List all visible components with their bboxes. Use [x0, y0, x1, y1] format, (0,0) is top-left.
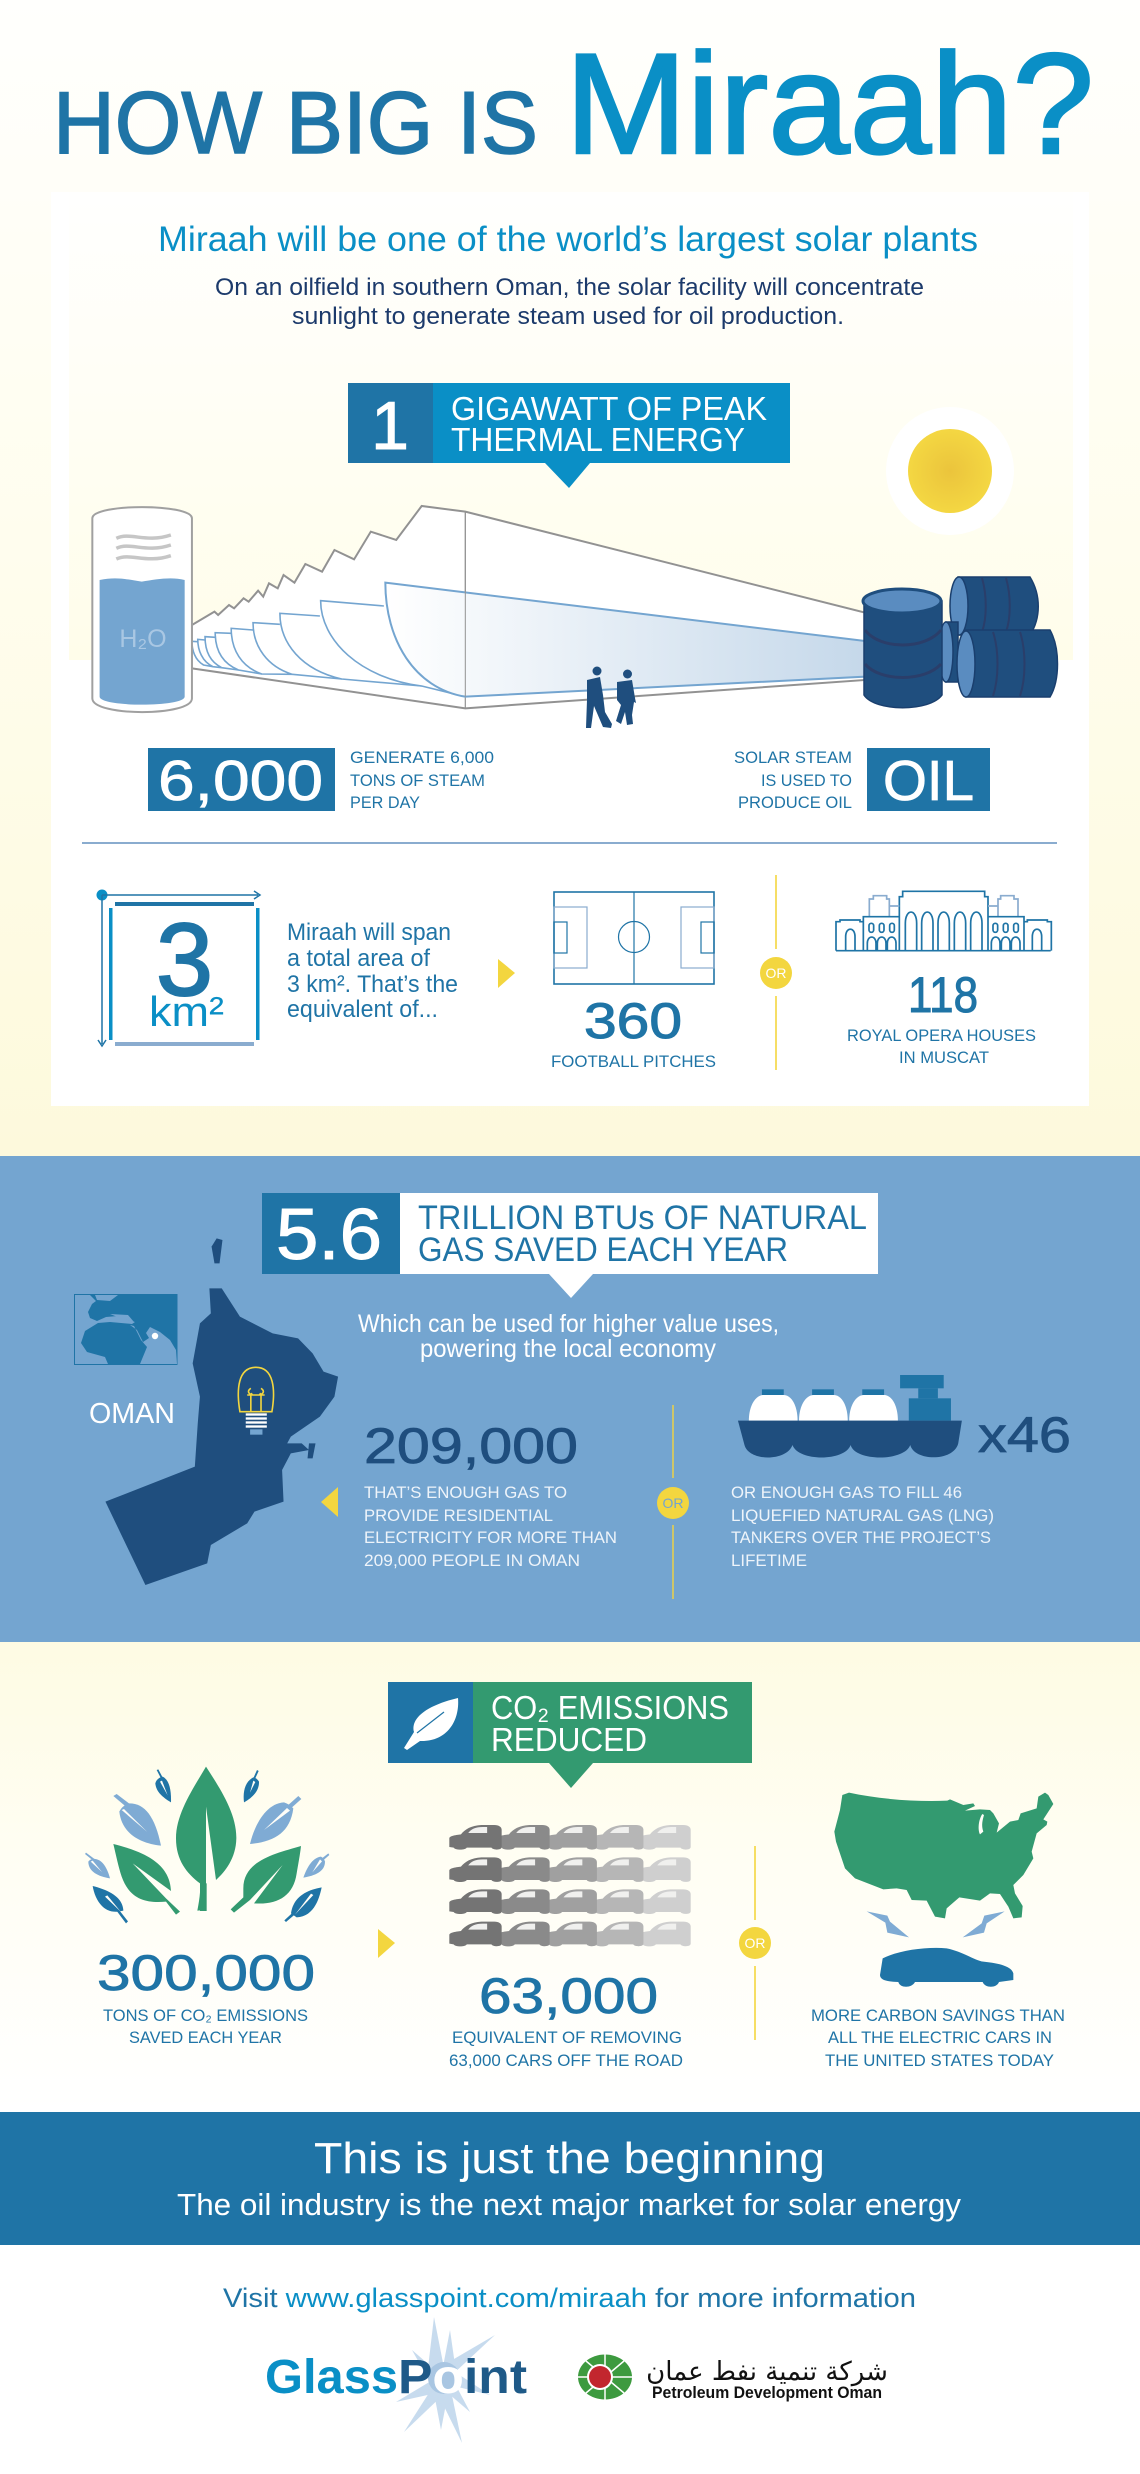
stat: oil: IS USED TO	[761, 771, 852, 790]
banner: CO2 emissions: CO₂ EMISSIONS	[491, 1689, 729, 1726]
stat: 209,000 people	[364, 1418, 617, 1570]
divider: or: OR	[766, 965, 786, 981]
stat: 209,000 people: PROVIDE RESIDENTIAL	[364, 1506, 553, 1525]
label: x46: x46	[978, 1407, 1071, 1463]
banner: 5.6 trillion BTUs	[262, 1193, 878, 1298]
text: electric cars comparison	[811, 2006, 1065, 2070]
stat: 6,000 tons of steam: TONS OF STEAM	[350, 771, 485, 790]
divider: or	[739, 1846, 771, 2040]
stat: 209,000 people: 209,000	[364, 1418, 578, 1474]
map: Oman	[105, 1238, 338, 1585]
icon: royal opera house	[836, 891, 1051, 951]
stat: 300,000 tons: 300,000	[97, 1945, 315, 2001]
text: electric cars comparison: ALL THE ELECTRIC CARS IN	[828, 2028, 1052, 2047]
label: Oman: OMAN	[89, 1398, 175, 1430]
stat: 360 football pitches	[551, 993, 716, 1071]
icon: inset world map	[74, 1294, 177, 1364]
banner: 1 gigawatt: GIGAWATT OF PEAK	[451, 390, 767, 427]
closing band: The oil industry is the next major market for solar energy	[177, 2187, 962, 2222]
text: area description: 3 km². That’s the	[287, 971, 458, 998]
intro paragraph	[215, 274, 924, 330]
text: LNG tankers: LIQUEFIED NATURAL GAS (LNG)	[731, 1506, 994, 1525]
stat: 63,000 cars: 63,000	[479, 1968, 658, 2024]
icon: light bulb	[238, 1367, 274, 1435]
title	[53, 25, 1094, 184]
divider: or	[657, 1405, 689, 1599]
icon: 3 km2 area: 3	[156, 902, 213, 1017]
divider: or: OR	[662, 1495, 684, 1511]
closing band: This is just the beginning	[314, 2134, 825, 2183]
text: LNG tankers: OR ENOUGH GAS TO FILL 46	[731, 1483, 962, 1502]
solar collector illustration	[192, 506, 865, 708]
label: H2O: H₂O	[119, 625, 167, 653]
logo: GlassPoint: Point	[398, 2351, 527, 2404]
divider: or: OR	[744, 1935, 766, 1951]
stat: oil: OIL	[883, 749, 974, 813]
logo: GlassPoint	[265, 2317, 527, 2443]
banner: 5.6 trillion BTUs: GAS SAVED EACH YEAR	[418, 1231, 788, 1269]
background: top section	[0, 0, 1140, 1156]
title: HOW BIG IS	[53, 73, 538, 172]
text: electric cars comparison: THE UNITED STATES TODAY	[825, 2051, 1054, 2070]
icon: football pitch	[554, 892, 714, 984]
text: LNG tankers: TANKERS OVER THE PROJECT’S	[731, 1528, 991, 1547]
logo: Petroleum Development Oman	[578, 2354, 888, 2402]
stat: 209,000 people: ELECTRICITY FOR MORE THAN	[364, 1528, 617, 1547]
text: LNG tankers	[731, 1483, 994, 1570]
stat: 6,000 tons of steam: GENERATE 6,000	[350, 748, 494, 767]
stat: oil: PRODUCE OIL	[738, 793, 852, 812]
arrow	[378, 1929, 395, 1958]
icon: LNG tanker	[738, 1375, 962, 1457]
closing band	[0, 2112, 1140, 2245]
text: LNG tankers: LIFETIME	[731, 1551, 807, 1570]
stat: 360 football pitches: 360	[584, 993, 682, 1049]
footer background	[0, 2245, 1140, 2474]
stat: 118 opera houses	[847, 967, 1036, 1067]
panel: solar plant overview	[51, 192, 1089, 1106]
stat: 360 football pitches: FOOTBALL PITCHES	[551, 1052, 716, 1071]
stat: 300,000 tons: TONS OF CO₂ EMISSIONS	[103, 2006, 308, 2025]
icon: two people	[586, 666, 636, 728]
stat: 300,000 tons: SAVED EACH YEAR	[129, 2028, 282, 2047]
title: Miraah?	[565, 25, 1094, 184]
text: area description: Miraah will span	[287, 919, 451, 946]
subheading: Miraah will be one of the world’s largest solar plants	[158, 220, 978, 259]
stat: 63,000 cars: EQUIVALENT OF REMOVING	[452, 2028, 682, 2047]
stat: 6,000 tons of steam: PER DAY	[350, 793, 420, 812]
stat: 118 opera houses: ROYAL OPERA HOUSES	[847, 1026, 1036, 1045]
panel: natural gas saved	[0, 1156, 1140, 1642]
divider: or	[760, 875, 792, 1070]
icon: grid of cars	[449, 1825, 691, 1946]
text: higher value uses: Which can be used for higher value uses,	[358, 1310, 779, 1338]
stat: 6,000 tons of steam	[148, 748, 494, 813]
stat: oil	[734, 748, 990, 813]
icon: sun	[886, 407, 1014, 535]
text: higher value uses	[358, 1310, 779, 1363]
text: visit link: Visit www.glasspoint.com/miraah for more information	[223, 2283, 916, 2313]
icon: oil barrels	[863, 577, 1058, 708]
text: higher value uses: powering the local economy	[420, 1335, 716, 1363]
stat: 118 opera houses: IN MUSCAT	[899, 1048, 989, 1067]
stat: 300,000 tons	[97, 1945, 315, 2047]
stat: 209,000 people: 209,000 PEOPLE IN OMAN	[364, 1551, 580, 1570]
banner: 1 gigawatt	[348, 383, 790, 488]
banner: CO2 emissions: REDUCED	[491, 1721, 647, 1758]
banner: CO2 emissions	[388, 1682, 752, 1788]
stat: oil: SOLAR STEAM	[734, 748, 852, 767]
logo: Petroleum Development Oman: Petroleum Development Oman	[652, 2383, 882, 2402]
arrow	[321, 1487, 338, 1517]
intro paragraph: sunlight to generate steam used for oil production.	[292, 303, 844, 330]
banner: 5.6 trillion BTUs: 5.6	[276, 1195, 382, 1275]
logo: Petroleum Development Oman: شركة تنمية نفط عمان	[646, 2357, 888, 2387]
text: electric cars comparison: MORE CARBON SAVINGS THAN	[811, 2006, 1065, 2025]
icon: 3 km2 area	[96, 890, 260, 1046]
banner: 1 gigawatt: THERMAL ENERGY	[451, 421, 745, 458]
icon: 3 km2 area: km²	[149, 988, 224, 1035]
text: area description	[287, 919, 458, 1023]
intro paragraph: On an oilfield in southern Oman, the solar facility will concentrate	[215, 274, 924, 301]
icon: white leaf	[404, 1698, 458, 1750]
arrow	[498, 959, 515, 988]
stat: 6,000 tons of steam: 6,000	[158, 749, 323, 813]
banner: 1 gigawatt: 1	[371, 388, 409, 464]
banner: 5.6 trillion BTUs: TRILLION BTUs OF NATURAL	[418, 1199, 867, 1237]
icon: leaves	[85, 1767, 329, 1923]
text: area description: equivalent of...	[287, 996, 438, 1023]
stat: 209,000 people: THAT’S ENOUGH GAS TO	[364, 1483, 567, 1502]
text: area description: a total area of	[287, 945, 430, 972]
stat: 63,000 cars: 63,000 CARS OFF THE ROAD	[449, 2051, 683, 2070]
panel: CO2 emissions reduced	[0, 1642, 1140, 2112]
icon: USA map and electric car	[834, 1793, 1053, 1987]
icon: water tank	[92, 507, 192, 712]
stat: 63,000 cars	[449, 1968, 683, 2070]
logo: GlassPoint: Glass	[265, 2351, 398, 2404]
stat: 118 opera houses: 118	[908, 967, 978, 1023]
